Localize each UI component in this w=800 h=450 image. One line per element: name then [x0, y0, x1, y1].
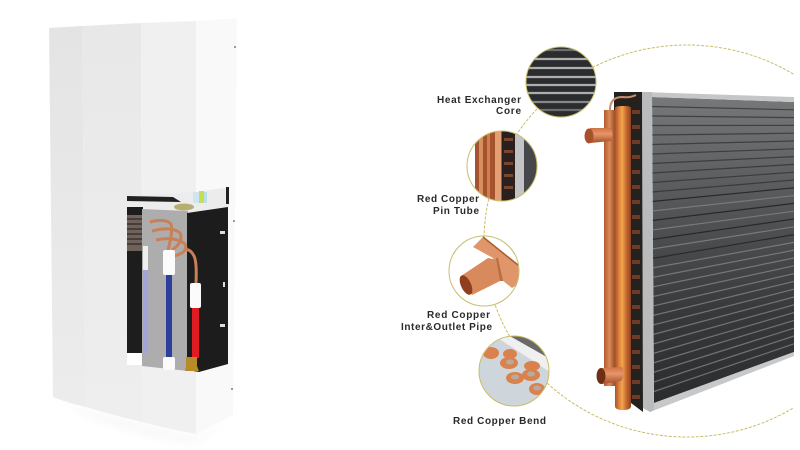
yellow-green block: [193, 191, 207, 203]
label: red copper inlet outlet pipe: Inter&Outlet Pipe: [401, 322, 492, 333]
label: red copper inlet outlet pipe: [401, 310, 492, 333]
copper bends: [150, 220, 196, 283]
label: red copper pin tube: Pin Tube: [433, 206, 479, 217]
black slab: [127, 196, 181, 202]
label: red copper pin tube: Red Copper: [417, 194, 479, 205]
return bend column: [614, 92, 643, 412]
upper dark tube lines: [652, 106, 794, 192]
grey foam panel: [142, 209, 188, 371]
core fins: [652, 97, 794, 403]
aluminium frame side: [642, 92, 654, 412]
heat exchanger product: [584, 92, 794, 412]
front header tube: [615, 106, 631, 410]
side screws: [231, 46, 236, 390]
black post: [226, 187, 229, 204]
lower light tube lines: [652, 242, 794, 392]
callout circle: copper bend: [478, 336, 550, 406]
white bottom block: [127, 353, 143, 365]
upper shelf: [127, 187, 229, 212]
aluminium frame bottom: [650, 352, 794, 412]
tan part: [174, 204, 194, 210]
coil stripes: [127, 215, 143, 251]
top stub pipe: [584, 128, 612, 144]
label: heat exchanger core: [437, 95, 521, 117]
blue pipe: [166, 275, 172, 357]
cabinet floor shadow: [56, 400, 232, 442]
callout circle: inlet outlet pipe: [449, 236, 520, 306]
rear header tube: [604, 110, 615, 386]
cabinet middle face: [82, 23, 142, 422]
brass fitting: [185, 357, 199, 371]
label: heat exchanger core: Heat Exchanger: [437, 95, 521, 106]
red pipe: [192, 308, 199, 358]
cabinet front right face: [141, 21, 196, 434]
panel slots: [220, 231, 225, 327]
blue strip in foam: [143, 270, 148, 353]
cabinet side face: [196, 18, 237, 434]
middle blended tube lines: [652, 188, 794, 258]
label: red copper bend: Red Copper Bend: [453, 416, 546, 427]
callout circle: heat exchanger core: [520, 47, 600, 117]
label: red copper pin tube: [417, 194, 479, 217]
cutaway opening: [127, 187, 229, 372]
dark left panel: [127, 207, 143, 353]
bottom stub pipe: [596, 367, 624, 384]
white fittings: [163, 250, 201, 370]
label: heat exchanger core: Core: [496, 106, 521, 117]
top copper loop: [610, 95, 636, 110]
cabinet unit with cutaway: [49, 18, 237, 442]
label: red copper inlet outlet pipe: Red Copper: [427, 310, 490, 321]
dashed ring: [484, 45, 800, 437]
cabinet left face: [49, 26, 86, 407]
callout circle: pin tube: [467, 130, 538, 202]
return bends: [632, 110, 640, 399]
white strip in foam: [143, 246, 148, 270]
aluminium frame top: [642, 92, 794, 102]
black right panel: [187, 207, 228, 372]
